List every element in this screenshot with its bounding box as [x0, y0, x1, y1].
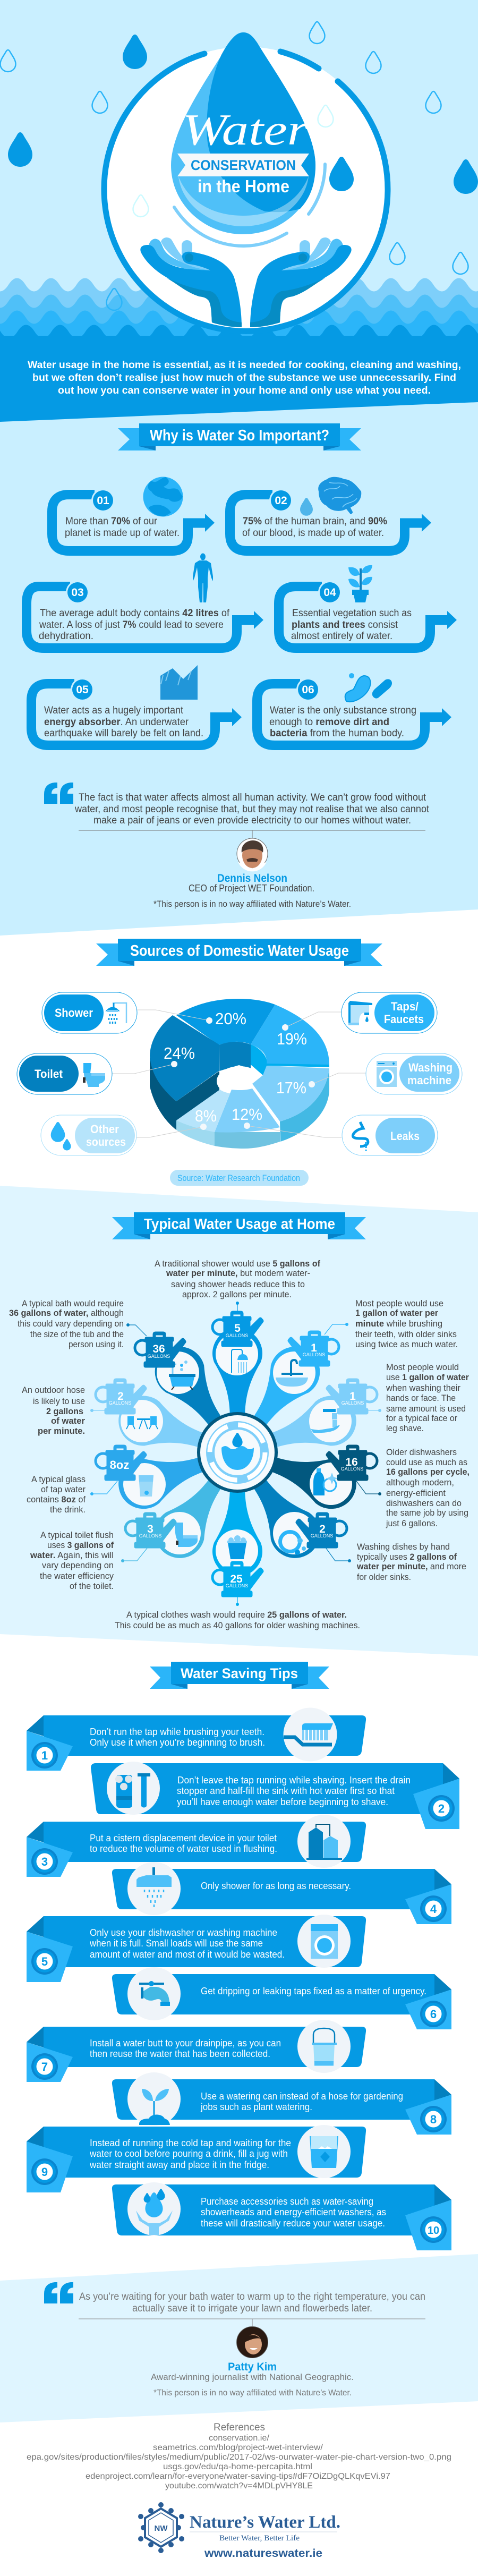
tip 2: you’ll have enough water before beginning to shave.	[177, 1797, 388, 1807]
icon: water drops	[51, 1122, 71, 1150]
slice: shower 20%	[176, 999, 275, 1045]
text: brushing teeth: Most people would use	[355, 1298, 443, 1308]
card 06	[257, 673, 451, 745]
source note	[170, 1170, 309, 1186]
legend: taps	[342, 992, 437, 1033]
icon: toilet	[175, 1523, 198, 1547]
can labels: 8oz	[110, 1458, 129, 1472]
text: clothes wash: This could be as much as 40 gallons for older washing machines.	[115, 1620, 360, 1630]
splash arcs	[174, 164, 325, 246]
text: bath: 36 gallons of water, although	[9, 1308, 124, 1318]
text: shower: approx. 2 gallons per minute.	[182, 1289, 292, 1299]
slice: washing 17%	[252, 1066, 329, 1121]
text: glass of water	[27, 1474, 86, 1515]
value labels: 24%	[164, 1044, 195, 1062]
intro text: but we often don’t realise just how much of the substance we use unnecessarily. Find	[32, 372, 456, 384]
legend: toilet	[17, 1053, 112, 1094]
icon: brain and drop	[300, 477, 361, 516]
big water drop	[171, 32, 315, 234]
text: washing hands: Most people would	[386, 1362, 459, 1372]
icon: leaking pipe	[353, 1122, 368, 1151]
card 04: 04	[323, 586, 336, 599]
tip 10: 10	[428, 2225, 439, 2237]
icon: faucet	[348, 1001, 372, 1025]
icon: quotation mark	[44, 783, 73, 804]
legend: washing machine: machine	[407, 1074, 451, 1087]
card 04	[279, 565, 457, 648]
tip 9: 9	[41, 2165, 48, 2179]
can labels: GALLONS	[109, 1400, 131, 1406]
heading: Water Saving Tips: Water Saving Tips	[181, 1665, 298, 1681]
tip 6: Get dripping or leaking taps fixed as a matter of urgency.	[201, 1986, 426, 1996]
can labels: 5	[234, 1322, 241, 1334]
quote: Patty Kim	[44, 2282, 425, 2398]
icon: bucket	[227, 1535, 247, 1559]
can labels: GALLONS	[148, 1354, 170, 1359]
tip 8: 8	[430, 2113, 437, 2126]
legend: washing machine: Washing	[408, 1061, 453, 1074]
text: dishwasher: dishwashers can do	[386, 1498, 462, 1508]
card 01: 01	[97, 495, 109, 507]
title: Conservation: CONSERVATION	[191, 157, 296, 173]
tip 8: Use a watering can instead of a hose for gardening	[201, 2091, 403, 2102]
icon: plant sprout	[139, 2089, 170, 2125]
quote text: As you’re waiting for your bath water to warm up to the right temperature, you can	[79, 2291, 425, 2302]
text: outdoor hose: is likely to use	[33, 1396, 85, 1406]
can labels: GALLONS	[226, 1583, 248, 1588]
text: washing dishes: Washing dishes by hand	[357, 1542, 450, 1552]
text: glass of water: of tap water	[41, 1484, 86, 1494]
heading: Why is Water So Important?	[118, 423, 361, 450]
text: outdoor hose: per minute.	[38, 1426, 85, 1436]
can labels	[109, 1322, 364, 1588]
legend: taps: Faucets	[384, 1013, 424, 1026]
solid water drops	[8, 35, 478, 194]
website: www.natureswater.ie	[204, 2547, 322, 2560]
can labels: GALLONS	[311, 1533, 333, 1538]
text: dishwasher: energy-efficient	[386, 1488, 446, 1498]
slice: other side	[176, 1120, 215, 1146]
text: dishwasher: the same job by using	[386, 1508, 468, 1518]
slice: leaks 12%	[215, 1089, 280, 1133]
role: CEO of Project WET Foundation.	[189, 883, 314, 894]
text: washing hands: leg shave.	[386, 1423, 424, 1433]
tip 6	[112, 1967, 451, 2029]
company name: Nature’s Water Ltd.	[190, 2513, 340, 2532]
text: clothes wash	[115, 1610, 360, 1630]
text: washing hands: hands or face. The	[386, 1393, 456, 1403]
quote text: actually save it to irrigate your lawn and flowerbeds later.	[132, 2302, 372, 2314]
card 03: water. A loss of just 7% could lead to severe	[39, 619, 224, 631]
tip 2: Don’t leave the tap running while shaving. Insert the drain	[177, 1775, 411, 1786]
quote text: The fact is that water affects almost all human activity. We can’t grow food without	[79, 792, 426, 803]
text: outdoor hose: of water	[51, 1416, 85, 1426]
leader lines	[112, 1010, 366, 1137]
value labels: 8%	[195, 1107, 217, 1125]
name: Patty Kim	[228, 2361, 277, 2373]
tip 5: when it is full. Small loads will use the same	[89, 1938, 263, 1949]
card 01: More than 70% of our	[65, 516, 158, 527]
tip 4	[112, 1862, 451, 1924]
tagline: Better Water, Better Life	[219, 2534, 300, 2543]
icon: garden furniture	[126, 1416, 158, 1429]
quote text	[79, 2291, 425, 2314]
text: shower: saving shower heads reduce this to	[171, 1279, 305, 1289]
card 04: Essential vegetation such as	[292, 608, 412, 619]
hub	[199, 1414, 276, 1491]
text: dishwasher: could use as much as	[386, 1457, 467, 1467]
card 06: enough to remove dirt and	[269, 717, 389, 728]
icon: shavers	[115, 1773, 150, 1808]
text: clothes wash: A typical clothes wash would require 25 gallons of water.	[126, 1610, 347, 1620]
tip 7: then reuse the water that has been collected.	[90, 2048, 270, 2059]
waves	[0, 278, 478, 369]
text: washing hands	[386, 1362, 469, 1433]
can labels: 36	[152, 1343, 165, 1355]
card 03: 03	[71, 586, 84, 599]
legend: leaks	[342, 1115, 438, 1155]
pale drop over water	[107, 288, 122, 310]
water usage wheel	[90, 1302, 381, 1606]
heading: Sources of Domestic Water Usage: Sources of Domestic Water Usage	[130, 942, 349, 959]
text: outdoor hose	[22, 1385, 85, 1436]
text: shower: A traditional shower would use 5 gallons of	[155, 1259, 320, 1269]
text: dishwasher: Older dishwashers	[386, 1447, 457, 1457]
card 06: bacteria from the human body.	[270, 728, 404, 739]
petal icon backgrounds	[121, 1333, 352, 1572]
slice: leaks side	[215, 1132, 280, 1149]
tip 4: Only shower for as long as necessary.	[201, 1881, 351, 1891]
card 01: planet is made up of water.	[65, 528, 180, 539]
text: shower: water per minute, but modern water-	[166, 1268, 310, 1278]
disclaimer: *This person is in no way affiliated with Nature’s Water.	[153, 899, 351, 909]
pale drops	[133, 105, 333, 217]
tip 9	[27, 2125, 366, 2192]
card 03: dehydration.	[39, 631, 93, 642]
can labels: 16	[345, 1456, 358, 1468]
tip 7: Install a water butt to your drainpipe, as you can	[90, 2038, 281, 2048]
tip 3: 3	[41, 1855, 48, 1868]
references: conservation.ie/	[209, 2434, 270, 2443]
text: washing hands: when washing their	[386, 1383, 460, 1393]
value labels: 17%	[276, 1078, 306, 1097]
can labels: 25	[230, 1573, 243, 1585]
tip 2	[91, 1762, 459, 1829]
can labels: 1	[349, 1390, 356, 1402]
text: brushing teeth: using twice as much water.	[355, 1339, 458, 1349]
heading: Typical Water Usage at Home: Typical Water Usage at Home	[144, 1215, 335, 1232]
icon: quotation mark	[44, 2282, 73, 2303]
icon: glass with ice	[310, 2136, 338, 2168]
icon: basin	[276, 1360, 308, 1387]
card 03: The average adult body contains 42 litres of	[40, 608, 230, 619]
page background: hero and why section	[0, 0, 478, 936]
card 05: earthquake will barely be felt on land.	[44, 728, 203, 739]
quote text: water, and most people recognise that, but they may not realise that we also cannot	[74, 803, 430, 815]
icon: washing hands	[311, 1409, 340, 1433]
heading: Sources of Domestic Water Usage	[96, 939, 382, 966]
references: edenproject.com/learn/for-everyone/water-saving-tips#dF7OiZDgQLKqvEVi.97	[86, 2472, 390, 2481]
text: toilet flush: vary depending on	[42, 1560, 114, 1570]
tip 10: showerheads and energy-efficient washers, as	[201, 2207, 386, 2217]
legend: washing machine	[366, 1053, 462, 1094]
can labels: GALLONS	[342, 1400, 364, 1406]
card 05: energy absorber. An underwater	[44, 717, 189, 728]
text: toilet flush: the water efficiency	[40, 1571, 114, 1581]
logo mark	[138, 2502, 184, 2553]
icon: seismic wave	[160, 665, 198, 700]
tip 8: jobs such as plant watering.	[200, 2102, 312, 2112]
can labels: GALLONS	[226, 1333, 248, 1338]
card 02: of our blood, is made up of water.	[242, 528, 384, 539]
icon: shower	[232, 1349, 248, 1373]
tip 5: amount of water and most of it would be wasted.	[90, 1949, 285, 1960]
icon: hands and drops	[136, 2189, 173, 2235]
text: washing dishes: typically uses 2 gallons of	[357, 1552, 457, 1562]
slice: inner wall	[219, 1042, 251, 1071]
text: brushing teeth	[355, 1298, 458, 1349]
tip 3	[27, 1815, 366, 1877]
intro text: Water usage in the home is essential, as it is needed for cooking, cleaning and washing,	[28, 360, 461, 371]
logo	[138, 2502, 340, 2560]
text: bath: this could vary depending on	[18, 1319, 124, 1329]
text: brushing teeth: their teeth, with older sinks	[355, 1329, 457, 1339]
can labels: 3	[147, 1523, 153, 1535]
legend: other sources: sources	[86, 1135, 126, 1149]
outline water drops	[1, 22, 468, 274]
slice: hole	[217, 1066, 262, 1096]
white circle with ring	[103, 47, 388, 331]
card 05: 05	[76, 684, 89, 696]
text: bath: person using it.	[69, 1339, 124, 1349]
tip 9: water straight away and place it in the fridge.	[89, 2160, 269, 2170]
card 06: Water is the only substance strong	[270, 705, 416, 716]
drop inside circle	[329, 157, 354, 191]
data dots	[171, 1017, 315, 1130]
slice: other 8%	[176, 1090, 230, 1132]
heading: Why is Water So Important?: Why is Water So Important?	[150, 427, 329, 444]
text: toilet flush: uses 3 gallons of	[47, 1540, 114, 1550]
text: brushing teeth: 1 gallon of water per	[355, 1308, 438, 1318]
references: usgs.gov/edu/qa-home-percapita.html	[163, 2462, 312, 2471]
intro text	[28, 360, 461, 396]
tip 6: 6	[430, 2008, 437, 2021]
card 02: 02	[275, 495, 287, 507]
can labels: 2	[319, 1523, 326, 1535]
tip 10	[112, 2182, 451, 2250]
tip 3: to reduce the volume of water used in flushing.	[90, 1843, 277, 1854]
text: dishwasher	[386, 1447, 470, 1528]
card 05: Water acts as a hugely important	[44, 705, 184, 716]
portrait	[237, 2327, 268, 2358]
slice: washing side	[280, 1068, 329, 1142]
text: dishwasher: although modern,	[386, 1477, 454, 1487]
slice: taps 19%	[251, 1005, 329, 1065]
tip 10: Purchase accessories such as water-saving	[201, 2196, 373, 2207]
value labels: 12%	[232, 1105, 262, 1124]
quote text	[74, 792, 430, 826]
can labels: GALLONS	[303, 1352, 325, 1357]
text: washing hands: for a typical face or	[386, 1413, 457, 1423]
text: outdoor hose: 2 gallons	[46, 1406, 83, 1416]
tip 5: Only use your dishwasher or washing machine	[90, 1927, 277, 1938]
tip 5	[27, 1915, 366, 1982]
value labels: 20%	[215, 1009, 246, 1028]
icon: globe	[143, 477, 183, 516]
legend: leaks: Leaks	[390, 1129, 420, 1143]
legend: toilet: Toilet	[35, 1067, 63, 1081]
card 03	[27, 554, 263, 648]
can labels: GALLONS	[139, 1533, 161, 1538]
title: Water: Water	[182, 105, 308, 155]
text: washing dishes: water per minute, and more	[356, 1561, 466, 1571]
tip 1	[27, 1707, 366, 1771]
can labels: 2	[117, 1390, 124, 1402]
text: brushing teeth: minute while brushing	[355, 1319, 442, 1329]
card 01	[52, 477, 215, 551]
icon: toilet	[83, 1063, 105, 1087]
quote text: make a pair of jeans or even provide electricity to our homes without water.	[93, 814, 411, 826]
slice: toilet sides	[150, 1057, 219, 1130]
can labels: 1	[311, 1342, 317, 1354]
legend: shower	[42, 992, 137, 1033]
legend: other sources: Other	[90, 1123, 119, 1136]
card 02: 75% of the human brain, and 90%	[243, 516, 387, 527]
card 06: 06	[302, 684, 314, 696]
tip 4: 4	[430, 1902, 437, 1916]
references: youtube.com/watch?v=4MDLpVHY8LE	[165, 2481, 313, 2490]
cupped hands	[140, 237, 352, 327]
text: washing dishes: for older sinks.	[357, 1572, 411, 1582]
text: washing dishes	[356, 1542, 466, 1582]
tip 2: 2	[438, 1802, 445, 1815]
tip 1: Don’t run the tap while brushing your teeth.	[90, 1727, 264, 1737]
tip 9: water to cool before pouring a drink, fill a jug with	[89, 2148, 288, 2159]
tip 7	[27, 2020, 366, 2082]
text: glass of water: contains 8oz of	[27, 1494, 86, 1504]
disclaimer: *This person is in no way affiliated with Nature’s Water.	[153, 2388, 352, 2398]
heading: Typical Water Usage at Home	[112, 1212, 366, 1239]
text: toilet flush: A typical toilet flush	[40, 1530, 114, 1540]
role: Award-winning journalist with National Geographic.	[151, 2372, 354, 2382]
leader dots	[90, 1302, 381, 1606]
source note: Source: Water Research Foundation	[177, 1173, 300, 1183]
icon: tap	[139, 1981, 170, 2006]
quote: Patty Kim background	[0, 2254, 478, 2422]
text: toilet flush: of the toilet.	[70, 1581, 114, 1591]
text: outdoor hose: An outdoor hose	[22, 1385, 85, 1395]
card 02	[230, 477, 431, 551]
tip 9: Instead of running the cold tap and waiting for the	[90, 2138, 291, 2148]
references: epa.gov/sites/production/files/styles/medium/public/2017-02/ws-ourwater-water-pie-chart-version-two_0.png	[27, 2453, 451, 2462]
leader lines	[92, 1303, 380, 1604]
text: dishwasher: 16 gallons per cycle,	[386, 1467, 470, 1477]
text: shower	[155, 1259, 320, 1299]
tip 3: Put a cistern displacement device in your toilet	[90, 1833, 277, 1843]
card 04: almost entirely of water.	[291, 631, 392, 642]
watering cans	[96, 1311, 377, 1597]
petals	[112, 1328, 363, 1577]
legend: taps: Taps/	[391, 1000, 419, 1013]
icon: human body	[193, 554, 213, 602]
tip 10: these will drastically reduce your water usage.	[201, 2218, 385, 2229]
can labels: GALLONS	[341, 1466, 363, 1472]
icon: detergent	[313, 1468, 338, 1495]
card 04: plants and trees consist	[292, 619, 398, 631]
hero illustration	[0, 22, 478, 369]
icon: bacteria	[345, 673, 392, 702]
text: bath	[9, 1298, 124, 1349]
text: toilet flush: water. Again, this will	[30, 1550, 114, 1560]
icon: potted plant	[348, 565, 372, 602]
slice: toilet 24%	[150, 1015, 219, 1101]
icon: shower head	[136, 1867, 172, 1907]
text: bath: the size of the tub and the	[30, 1329, 124, 1339]
text: bath: A typical bath would require	[22, 1298, 124, 1308]
card 05	[31, 665, 242, 745]
legend: other sources	[41, 1115, 136, 1155]
tip 1: 1	[41, 1749, 48, 1762]
text: dishwasher: just 6 gallons.	[386, 1518, 438, 1528]
text: glass of water: the drink.	[50, 1504, 86, 1515]
quote: Dennis Nelson	[44, 783, 430, 909]
icon: washing machine	[311, 1924, 338, 1959]
text: washing hands: same amount is used	[386, 1404, 466, 1414]
icon: bucket	[312, 2028, 337, 2066]
intro band background	[0, 336, 478, 422]
legend: shower: Shower	[55, 1006, 93, 1019]
text: toilet flush	[30, 1530, 114, 1591]
icon: bathtub	[169, 1361, 195, 1390]
tip 2: stopper and half-fill the sink with hot water first so that	[177, 1786, 395, 1796]
icon: toothbrush	[284, 1723, 333, 1745]
name: Dennis Nelson	[217, 872, 287, 885]
tip 1: Only use it when you’re beginning to brush.	[90, 1737, 265, 1748]
tip 5: 5	[41, 1955, 48, 1968]
white slant divider	[0, 909, 478, 1212]
icon: tanks	[306, 1824, 342, 1860]
value labels	[164, 1009, 307, 1125]
icon: plate and bubbles	[278, 1530, 306, 1555]
references: References	[214, 2422, 265, 2433]
heading: Water Saving Tips	[150, 1662, 329, 1689]
donut chart	[112, 999, 366, 1149]
icon: washer	[377, 1061, 397, 1087]
references	[27, 2422, 451, 2490]
icon: glass of water	[139, 1475, 153, 1497]
logo mark: NW	[154, 2524, 168, 2533]
icon: shower	[107, 1003, 126, 1024]
title ribbon	[177, 154, 309, 176]
portrait	[237, 838, 268, 871]
typical usage background	[0, 1186, 478, 1656]
title: in the Home: in the Home	[198, 176, 289, 196]
tip 8	[112, 2072, 451, 2135]
intro text: out how you can conserve water in your home and only use what you need.	[58, 385, 431, 396]
tip 7: 7	[41, 2060, 48, 2073]
text: glass of water: A typical glass	[31, 1474, 86, 1484]
references: seametrics.com/blog/project-wet-interview/	[153, 2443, 323, 2452]
text: washing hands: use 1 gallon of water	[386, 1372, 469, 1382]
value labels: 19%	[277, 1030, 307, 1048]
